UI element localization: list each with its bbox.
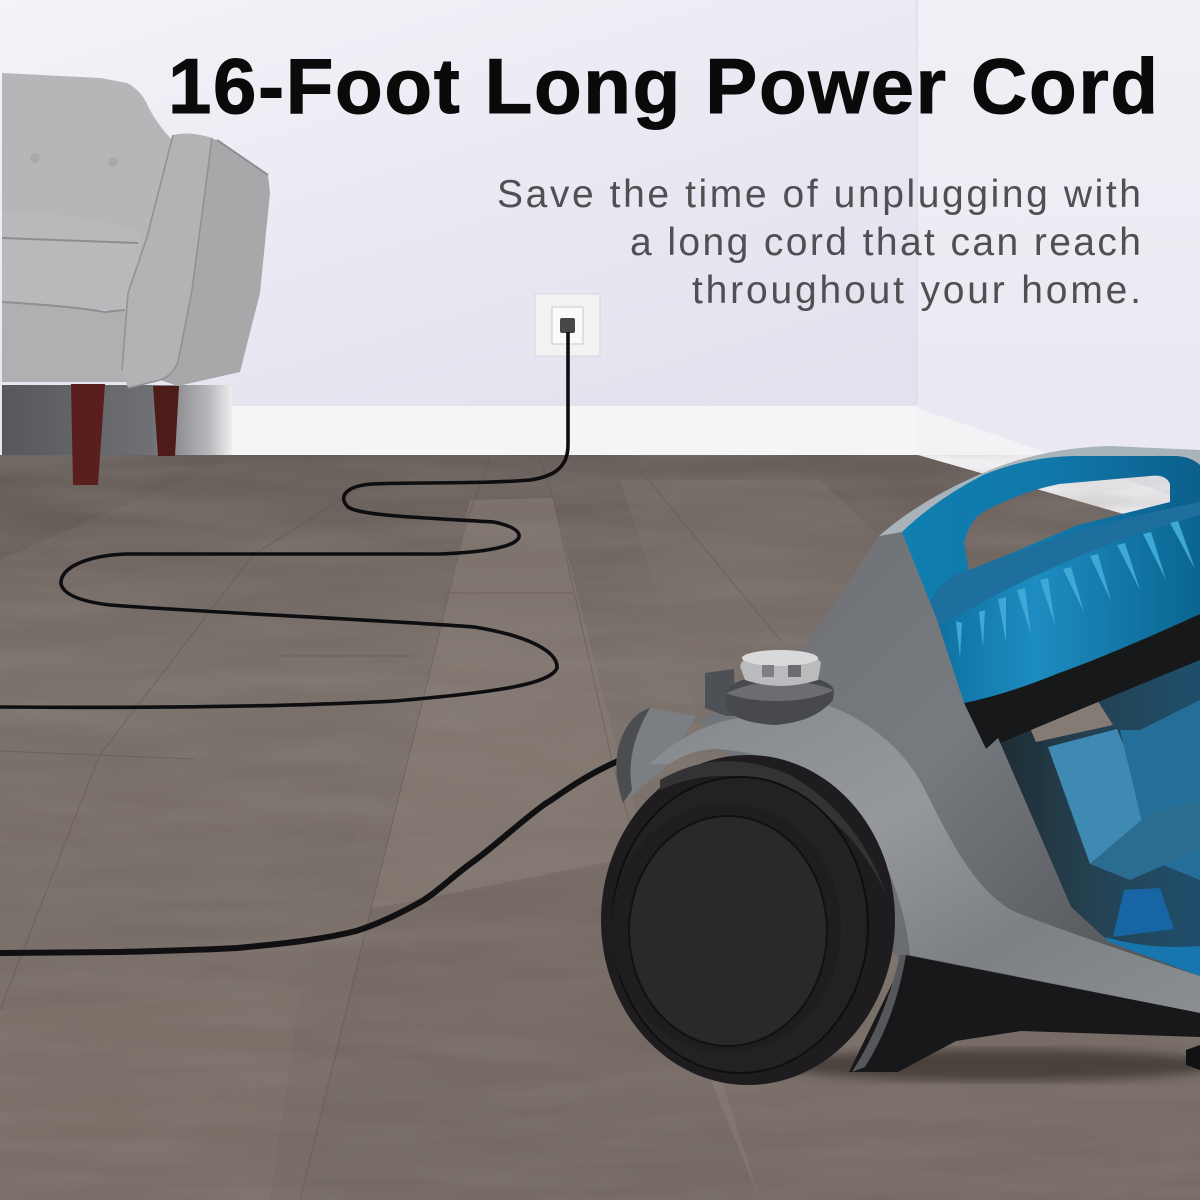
upper grey body — [700, 532, 1200, 1030]
canister — [964, 614, 1200, 976]
light shell around wheel — [650, 703, 1200, 1013]
power cord to vacuum — [0, 761, 618, 953]
wall outlet — [535, 294, 600, 356]
control dial — [705, 650, 834, 725]
description text: throughout your home. — [692, 269, 1141, 312]
wheel — [601, 755, 895, 1085]
handle — [879, 446, 1200, 606]
description text: Save the time of unplugging with — [497, 173, 1141, 216]
title: 16-Foot Long Power Cord — [168, 42, 1158, 130]
wall background — [0, 0, 1200, 540]
sofa legs — [71, 384, 179, 485]
wooden floor — [0, 455, 1200, 1200]
power cord to outlet — [0, 332, 568, 707]
blue lid — [925, 502, 1200, 703]
black base — [849, 955, 1200, 1072]
description text: a long cord that can reach — [630, 221, 1141, 264]
description text — [497, 173, 1141, 312]
vacuum cleaner — [601, 446, 1200, 1085]
hose port — [616, 708, 696, 803]
baseboard — [2, 385, 1200, 540]
sofa — [2, 73, 270, 485]
